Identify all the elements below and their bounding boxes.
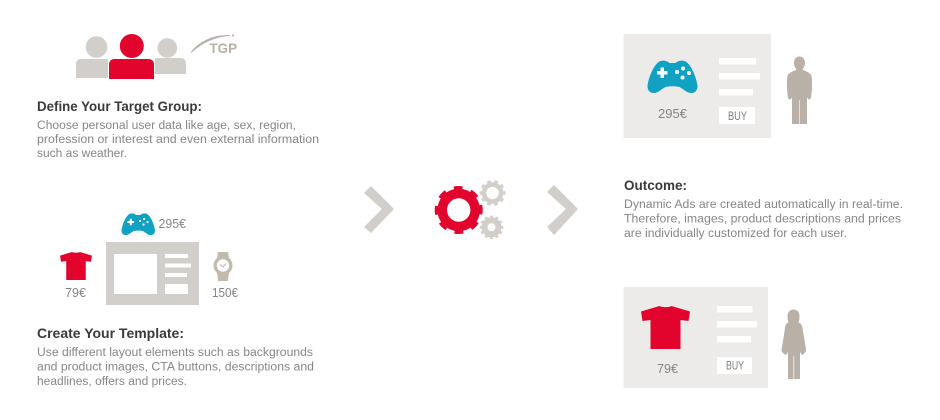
icon: female figure — [782, 310, 806, 379]
text block: template description: and product images, CTA buttons, descriptions and — [37, 362, 314, 374]
heading: outcome: Outcome: — [624, 178, 687, 193]
panel: create template — [37, 213, 314, 388]
ad background — [624, 287, 768, 388]
text block: target group description: such as weather. — [37, 148, 127, 160]
icon: t-shirt with price — [60, 252, 92, 300]
panel: define target group — [37, 34, 319, 160]
panel: t-shirt ad — [624, 287, 768, 388]
arrow: right chevron — [547, 185, 578, 235]
text block: outcome description — [624, 199, 903, 240]
price: 79€ — [657, 362, 678, 376]
icon: red gear — [437, 188, 481, 232]
description lines — [719, 58, 760, 96]
icon: watch with price — [212, 252, 238, 300]
icon: gears — [437, 181, 504, 238]
ad background — [624, 34, 771, 138]
buy button: BUY — [728, 111, 747, 123]
heading: create your template: Create Your Template: — [37, 326, 184, 341]
text block: outcome description: Dynamic Ads are created automatically in real-time. — [624, 199, 903, 211]
text block: template description — [37, 347, 314, 388]
text block: template description: headlines, offers and prices. — [37, 376, 187, 388]
icon: game controller — [648, 61, 698, 93]
text block: outcome description: are individually customized for each user. — [624, 228, 847, 240]
icon: target group people — [76, 34, 186, 79]
buy button — [719, 107, 755, 124]
panel: game controller ad — [624, 34, 771, 138]
heading: define your target group: Define Your Target Group: — [37, 99, 202, 114]
text block: target group description: Choose personal user data like age, sex, region, — [37, 120, 296, 132]
arrow: left chevron — [364, 186, 394, 233]
template layout diagram — [106, 242, 199, 305]
icon: t-shirt — [641, 306, 690, 349]
text block: target group description — [37, 120, 319, 160]
icon: game controller with price: 295€ — [158, 217, 186, 231]
text block: template description: Use different layout elements such as backgrounds — [37, 347, 313, 359]
text block: outcome description: Therefore, images, product descriptions and prices — [624, 214, 901, 226]
price: 295€ — [658, 107, 687, 121]
icon: watch with price: 150€ — [212, 286, 238, 300]
icon: TGP logo — [191, 34, 237, 56]
icon: t-shirt with price: 79€ — [65, 286, 86, 300]
icon: TGP logo: TGP — [210, 40, 237, 56]
buy button — [717, 357, 752, 374]
icon: upper grey gear — [481, 181, 504, 205]
buy button: BUY — [726, 360, 744, 372]
icon: male figure — [787, 56, 812, 124]
text block: target group description: profession or interest and even external information — [37, 134, 319, 146]
icon: game controller with price — [122, 213, 186, 235]
description lines — [717, 306, 757, 342]
icon: lower grey gear — [481, 216, 502, 238]
